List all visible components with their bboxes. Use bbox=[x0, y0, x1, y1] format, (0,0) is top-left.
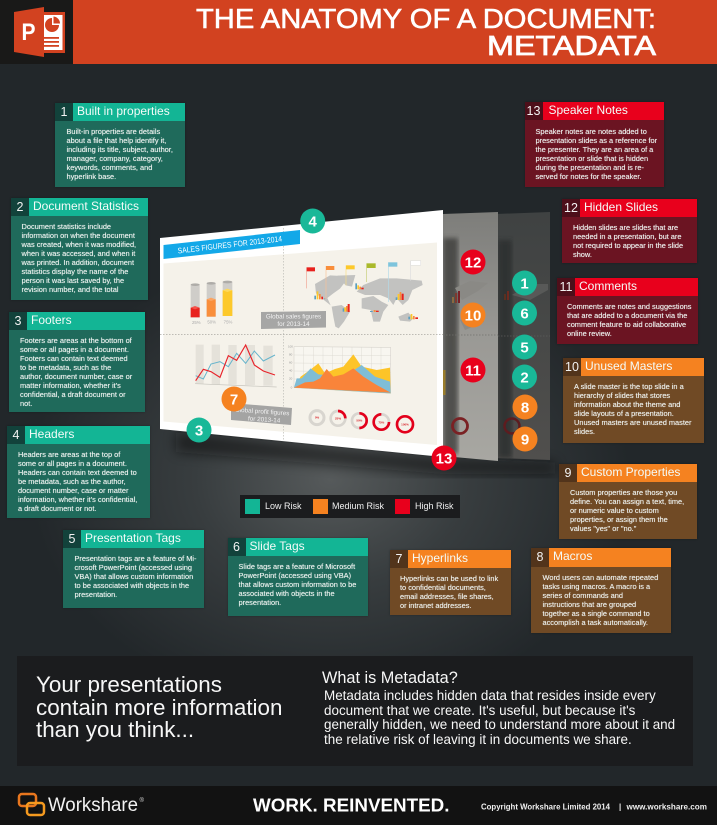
heading: Hyperlinks bbox=[412, 551, 468, 565]
body text: Footers are areas at the bottom of bbox=[20, 336, 132, 344]
header band bbox=[0, 0, 717, 64]
body text: statistics display the name of the bbox=[22, 266, 128, 276]
tagline: contain more information bbox=[36, 695, 282, 720]
title: THE ANATOMY OF A DOCUMENT: bbox=[196, 3, 656, 34]
body text: including its title, subject, author, bbox=[66, 144, 173, 154]
body text: properties, or assign them the bbox=[570, 514, 668, 524]
heading: Document Statistics bbox=[33, 199, 139, 213]
number badges on slides: 3 bbox=[195, 422, 203, 439]
metadata description: Metadata includes hidden data that resides inside every bbox=[324, 688, 656, 703]
body text: that allows custom information to be bbox=[238, 580, 356, 588]
body text: a draft document or not. bbox=[18, 504, 96, 512]
body text: information about the theme and bbox=[574, 400, 680, 408]
area chart: 100 bbox=[288, 345, 293, 349]
heading: 11 bbox=[560, 280, 572, 294]
body text: PowerPoint (accessed using VBA) bbox=[238, 570, 351, 580]
card 6: slide tags bbox=[228, 538, 368, 616]
number badges on slides: 1 bbox=[520, 275, 529, 292]
label: global profit figures: for 2013-14 bbox=[248, 415, 281, 425]
body text bbox=[542, 572, 658, 627]
body text: Word users can automate repeated bbox=[542, 572, 658, 582]
body text: person it was last saved by, the bbox=[22, 276, 124, 284]
card 7: hyperlinks bbox=[390, 550, 511, 615]
body text: manager, company, category, bbox=[66, 154, 163, 162]
card 5: presentation tags bbox=[63, 530, 204, 608]
card 4: headers bbox=[7, 426, 150, 518]
label: global sales figures: Global sales figures bbox=[266, 314, 321, 320]
body text: series of commands and bbox=[542, 590, 623, 600]
body text: hierarchy of slides that stores bbox=[574, 390, 670, 400]
card 8: macros bbox=[531, 548, 670, 633]
body text: Slide tags are a feature of Microsoft bbox=[238, 562, 355, 570]
donut charts: 25% bbox=[335, 417, 341, 421]
body text: values "yes" or "no." bbox=[570, 524, 636, 532]
body text: to confidential documents, bbox=[400, 582, 486, 592]
legend: high risk bbox=[395, 499, 454, 514]
heading: Speaker Notes bbox=[548, 103, 628, 117]
heading: 2 bbox=[17, 200, 23, 214]
body text: Footers can contain text deemed bbox=[20, 354, 128, 362]
title bbox=[196, 3, 656, 61]
body text: needed in a presentation, but are bbox=[573, 232, 681, 240]
number badges on slides: 6 bbox=[520, 305, 529, 322]
third sheet bbox=[443, 212, 550, 460]
metadata description: document that we create. It's useful, but because it's bbox=[324, 703, 635, 718]
heading: Comments bbox=[579, 279, 637, 293]
number badges on slides: 4 bbox=[309, 213, 318, 230]
heading: 8 bbox=[537, 550, 543, 564]
body text: Document statistics include bbox=[22, 222, 111, 230]
copyright: Copyright Workshare Limited 2014 bbox=[481, 802, 611, 812]
number badges on slides: 13 bbox=[436, 450, 452, 467]
body text: crosoft PowerPoint (accessed using bbox=[74, 562, 192, 572]
heading: Unused Masters bbox=[585, 359, 672, 373]
body text: Presentation tags are a feature of Mi- bbox=[74, 554, 197, 562]
number badges on slides: 11 bbox=[465, 362, 481, 379]
area chart: 20 bbox=[289, 377, 293, 381]
copyright bbox=[481, 802, 707, 812]
body text: or numeric value to custom bbox=[570, 506, 659, 514]
card 10: unused masters bbox=[563, 358, 704, 443]
number badges on slides: 2 bbox=[520, 369, 529, 386]
body text: presentation. bbox=[74, 590, 117, 598]
number badges on slides: 12 bbox=[465, 254, 481, 271]
body text: Unused masters are unused master bbox=[574, 418, 692, 426]
number badges on slides: 10 bbox=[465, 307, 481, 324]
body text: author, document number, case or bbox=[20, 372, 132, 380]
body text: not. bbox=[20, 398, 32, 408]
body text: confidential, a draft document or bbox=[20, 390, 126, 398]
heading bbox=[531, 548, 670, 567]
area chart: 0 bbox=[291, 385, 293, 389]
body text: tasks using macros. A macro is a bbox=[542, 582, 650, 590]
icon: PowerPoint logo: P bbox=[22, 19, 36, 46]
body text: that are added to a document via the bbox=[567, 310, 687, 320]
body text: matter information, whether it's bbox=[20, 380, 121, 390]
body text: email addresses, file shares, bbox=[400, 592, 494, 600]
second sheet bbox=[443, 212, 498, 461]
donut charts bbox=[310, 411, 413, 432]
icon: PowerPoint logo bbox=[14, 7, 65, 57]
body text: associated with objects in the bbox=[238, 588, 335, 598]
metadata heading: What is Metadata? bbox=[322, 669, 458, 687]
body text bbox=[238, 562, 356, 607]
heading: Custom Properties bbox=[581, 465, 680, 479]
legend: medium risk bbox=[313, 499, 384, 514]
heading bbox=[228, 538, 368, 556]
registered mark: ® bbox=[140, 797, 144, 804]
metadata description: the relative risk of leaving it in documents we share. bbox=[324, 732, 632, 747]
area chart: 40 bbox=[289, 369, 293, 373]
label: global sales figures: for 2013-14 bbox=[277, 321, 310, 328]
body text bbox=[535, 126, 658, 181]
body text bbox=[570, 488, 684, 533]
copyright: | bbox=[619, 802, 621, 812]
body text: presentation or slide that is hidden bbox=[536, 154, 648, 162]
cylinder chart: 50% bbox=[207, 320, 216, 325]
number badges on slides: 5 bbox=[520, 339, 529, 356]
card 3: footers bbox=[9, 312, 144, 412]
body text: to be associated with objects in the bbox=[74, 580, 189, 590]
cylinder chart: 75% bbox=[224, 319, 232, 324]
legend bbox=[240, 495, 460, 518]
heading: 6 bbox=[233, 540, 240, 554]
body text: Comments are notes and suggestions bbox=[567, 302, 691, 310]
footer band bbox=[0, 786, 717, 825]
number badges on slides bbox=[186, 208, 538, 470]
heading: Headers bbox=[29, 427, 74, 441]
body text: instructions that are grouped bbox=[542, 600, 636, 608]
card 11: comments bbox=[557, 278, 698, 344]
body text: some or all pages in a document. bbox=[20, 344, 129, 354]
copyright: www.workshare.com bbox=[625, 802, 707, 812]
Workshare wordmark: Workshare bbox=[48, 794, 138, 816]
body text: information, whether it's confidential, bbox=[18, 494, 137, 504]
title: METADATA bbox=[487, 30, 656, 61]
heading bbox=[11, 198, 148, 216]
heading: Presentation Tags bbox=[85, 531, 181, 545]
heading: Built in properties bbox=[77, 104, 170, 118]
body text: Hidden slides are slides that are bbox=[573, 222, 678, 232]
body text: served for notes for the speaker. bbox=[536, 172, 642, 180]
slide shadow on floor bbox=[176, 432, 555, 474]
heading: 1 bbox=[61, 105, 67, 119]
body text: hyperlink base. bbox=[66, 172, 116, 180]
heading bbox=[524, 102, 664, 120]
body text: slides. bbox=[574, 426, 595, 436]
world map with flags bbox=[307, 261, 423, 328]
heading bbox=[9, 312, 144, 330]
heading bbox=[563, 358, 704, 376]
area chart: 60 bbox=[289, 361, 293, 365]
icon: Workshare logo bbox=[19, 794, 44, 815]
area chart bbox=[288, 345, 391, 393]
heading: 7 bbox=[396, 552, 402, 566]
panel: what is metadata bbox=[17, 656, 693, 766]
body text bbox=[18, 450, 137, 512]
body text bbox=[21, 222, 136, 294]
donut charts: 100% bbox=[401, 422, 409, 426]
body text: Speaker notes are notes added to bbox=[536, 126, 647, 136]
heading bbox=[390, 550, 511, 568]
body text: slide layouts of a presentation. bbox=[574, 408, 674, 418]
body text: Headers can contain text deemed to bbox=[18, 468, 137, 476]
body text: define. You can assign a text, time, bbox=[570, 496, 684, 506]
body text: keywords, comments, and bbox=[66, 162, 152, 172]
legend: high risk: High Risk bbox=[415, 501, 454, 511]
legend: low risk: Low Risk bbox=[265, 501, 302, 511]
body text: together as a single command to bbox=[542, 608, 650, 618]
tagline: Your presentations bbox=[36, 672, 222, 697]
card 13: speaker notes bbox=[524, 102, 664, 187]
body text: Hyperlinks can be used to link bbox=[400, 574, 498, 582]
body text: during the presentation and is re- bbox=[536, 162, 644, 172]
heading bbox=[562, 199, 697, 217]
main slide bbox=[160, 210, 443, 457]
donut charts: 0% bbox=[315, 416, 319, 420]
body text bbox=[566, 302, 692, 338]
body text: Custom properties are those you bbox=[570, 488, 677, 496]
metadata description: generally hidden, we need to understand more about it and bbox=[324, 717, 675, 732]
body text: was printed. In addition, document bbox=[22, 258, 134, 266]
label: global profit figures: Global profit figures bbox=[235, 407, 290, 417]
body text: information on when the document bbox=[22, 230, 135, 240]
heading: 10 bbox=[565, 360, 579, 374]
heading: Slide Tags bbox=[250, 539, 305, 553]
heading: 13 bbox=[527, 104, 540, 118]
body text: about a file that help identify it, bbox=[66, 136, 166, 144]
body text: revision number, and the total bbox=[22, 284, 118, 294]
heading bbox=[559, 464, 697, 482]
heading: Hidden Slides bbox=[584, 200, 658, 214]
heading: 9 bbox=[565, 466, 571, 480]
body text bbox=[573, 222, 684, 258]
card 12: hidden slides bbox=[562, 199, 697, 263]
legend: low risk bbox=[245, 499, 302, 514]
body text: presentation. bbox=[238, 598, 281, 606]
heading: 12 bbox=[564, 201, 578, 215]
body text: when it was accessed, and when it bbox=[22, 248, 135, 258]
tagline bbox=[36, 672, 282, 742]
number badges on slides: 8 bbox=[521, 399, 529, 416]
area chart: 80 bbox=[289, 353, 293, 357]
heading: Macros bbox=[553, 549, 592, 563]
body text: A slide master is the top slide in a bbox=[574, 382, 684, 390]
body text: online review. bbox=[567, 328, 612, 338]
heading: Footers bbox=[31, 313, 72, 327]
tagline: than you think... bbox=[36, 717, 194, 742]
slide banner: SALES FIGURES FOR 2013-2014 bbox=[177, 234, 283, 255]
heading bbox=[55, 103, 185, 121]
body text: show. bbox=[573, 250, 592, 258]
body text: some or all pages in a document. bbox=[18, 458, 127, 468]
heading bbox=[7, 426, 150, 444]
heading bbox=[63, 530, 204, 548]
body text bbox=[66, 126, 173, 181]
cylinder chart: 25% bbox=[192, 320, 201, 325]
heading: 4 bbox=[13, 428, 19, 442]
cylinder chart bbox=[191, 281, 232, 325]
body text: be metadata, such as the author, bbox=[18, 476, 126, 486]
body text bbox=[74, 554, 197, 599]
line chart bbox=[195, 345, 277, 387]
body text bbox=[20, 336, 132, 408]
number badges on slides: 7 bbox=[230, 391, 238, 408]
body text bbox=[574, 382, 692, 436]
body text: presentation slides as a reference for bbox=[536, 136, 657, 144]
body text: document number, case or matter bbox=[18, 486, 129, 494]
heading: 3 bbox=[15, 314, 21, 328]
heading: 5 bbox=[69, 532, 75, 546]
body text: Headers are areas at the top of bbox=[18, 450, 120, 458]
legend: medium risk: Medium Risk bbox=[332, 501, 384, 511]
body text: accomplish a task automatically. bbox=[542, 618, 648, 626]
card 1: built in properties bbox=[55, 103, 185, 187]
donut charts: 75% bbox=[378, 420, 385, 424]
donut charts: 50% bbox=[356, 419, 363, 423]
metadata description bbox=[324, 688, 675, 747]
body text: or intranet addresses. bbox=[400, 600, 471, 610]
card 2: document statistics bbox=[11, 198, 148, 300]
body text: comment feature to aid collaborative bbox=[567, 320, 686, 328]
heading bbox=[557, 278, 698, 296]
body text: to be metadata, such as the bbox=[20, 362, 111, 372]
body text: VBA) that allows custom information bbox=[74, 572, 193, 580]
body text: the presenter. They are an area of a bbox=[536, 144, 653, 154]
label: global sales figures bbox=[261, 311, 326, 329]
slide cream panel bbox=[164, 242, 437, 445]
body text bbox=[400, 574, 498, 610]
body text: was created, when it was modified, bbox=[22, 240, 136, 248]
tagline: WORK. REINVENTED. bbox=[253, 796, 450, 816]
label: global profit figures bbox=[231, 403, 292, 425]
number badges on slides: 9 bbox=[521, 431, 529, 448]
body text: not required to appear in the slide bbox=[573, 240, 683, 250]
body text: Built-in properties are details bbox=[66, 126, 160, 136]
card 9: custom properties bbox=[559, 464, 697, 539]
